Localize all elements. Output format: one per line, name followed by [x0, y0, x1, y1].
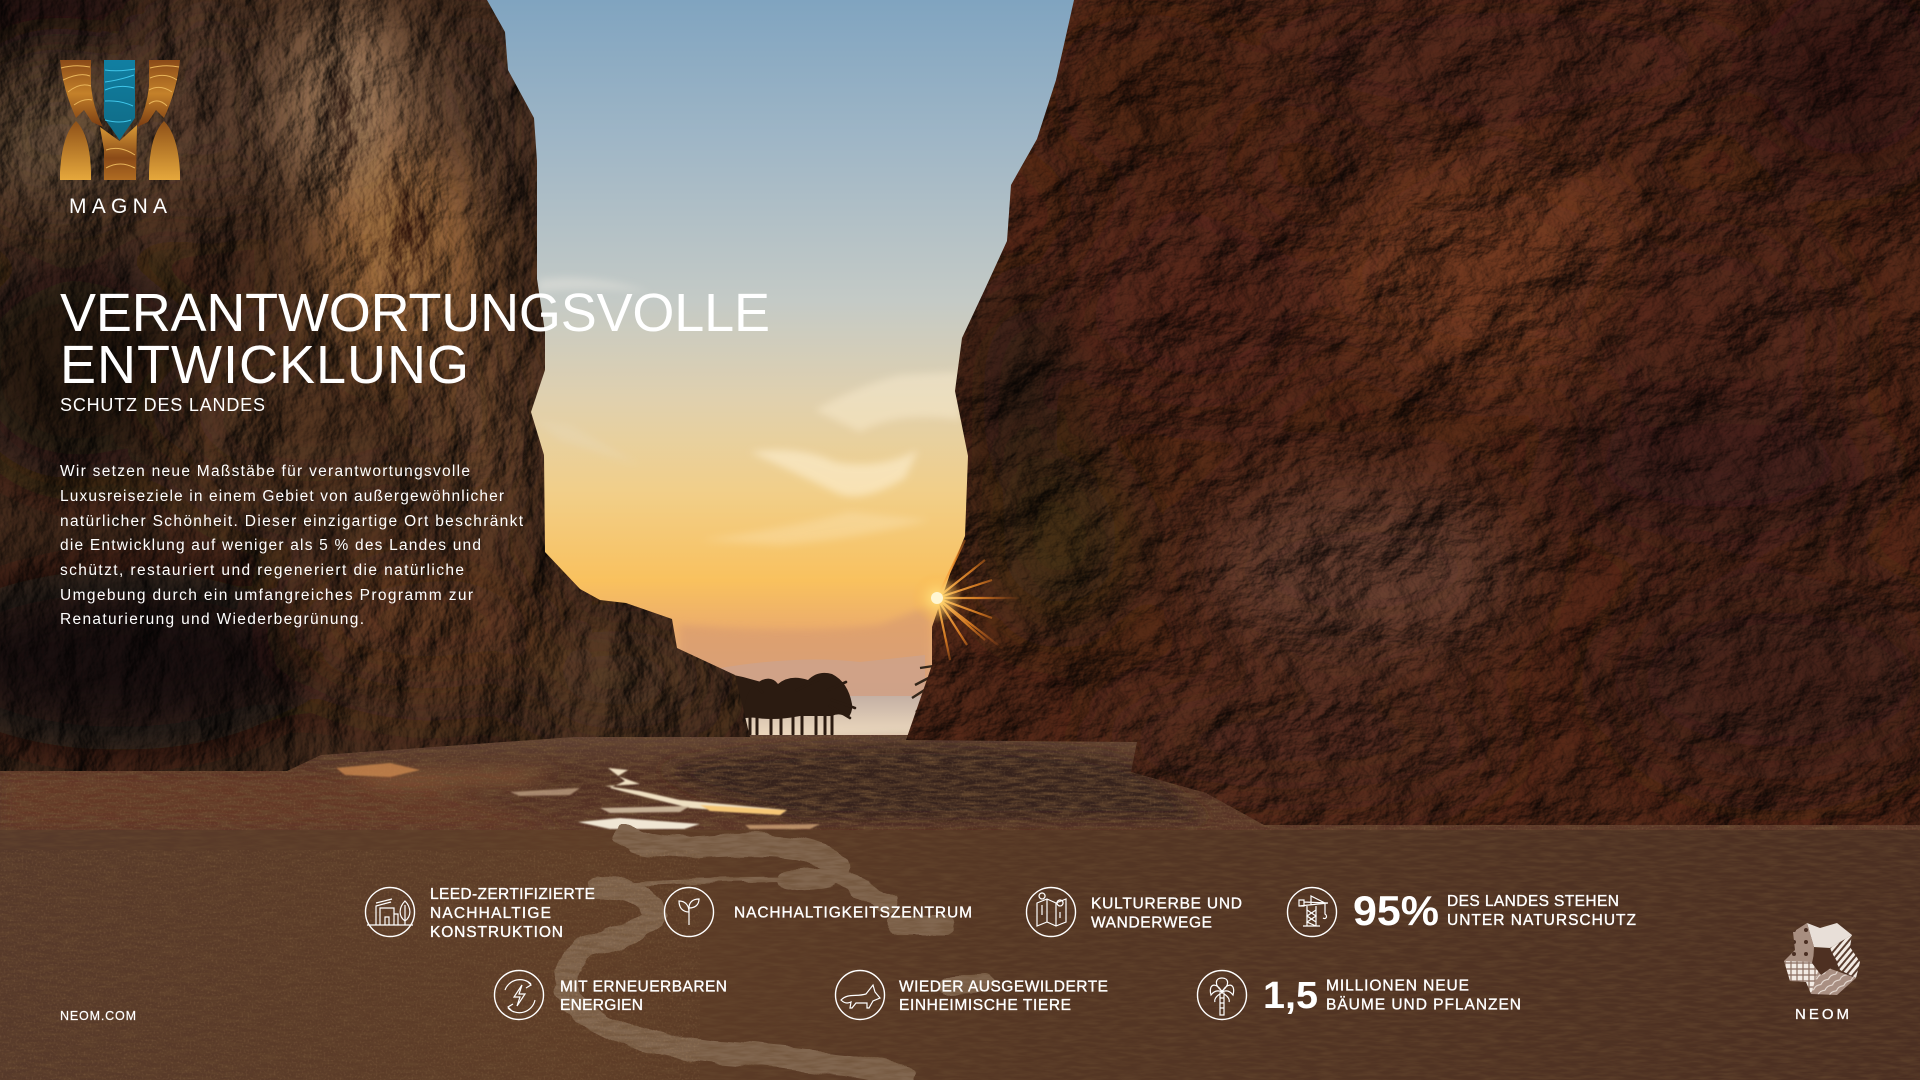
logo mark — [1784, 923, 1860, 995]
body text: natürlicher Schönheit. Dieser einzigartige Ort beschränkt — [60, 513, 524, 530]
sun — [911, 572, 963, 624]
feature: sustainability centre: NACHHALTIGKEITSZENTRUM — [734, 904, 972, 922]
left cliff — [0, 0, 760, 790]
title — [60, 283, 770, 395]
sky background — [440, 0, 1120, 700]
body text: schützt, restauriert und regeneriert die natürliche — [60, 562, 464, 579]
icon: palm tree — [1198, 970, 1246, 1020]
body text: die Entwicklung auf weniger als 5 % des Landes und — [60, 537, 481, 554]
body text: Luxusreiseziele in einem Gebiet von außergewöhnlicher — [60, 488, 504, 505]
stat: 95 percent protected — [1288, 887, 1636, 936]
logo wordmark: NEOM — [1795, 1006, 1849, 1023]
icon: lightning and arrows — [494, 970, 544, 1020]
feature: reintroduced native animals: WIEDER AUSGEWILDERTE — [899, 978, 1108, 996]
number: 1,5 — [1263, 975, 1318, 1017]
feature: cultural heritage and trails: KULTURERBE UND — [1091, 896, 1242, 912]
body text: Umgebung durch ein umfangreiches Programm zur — [60, 587, 473, 604]
stream through the band — [566, 836, 985, 1076]
palm fronds at right cliff — [912, 665, 940, 712]
number: 95% — [1353, 887, 1439, 934]
feature: LEED-certified construction — [366, 886, 595, 941]
icon: map — [1026, 888, 1076, 936]
feature: sustainability centre — [664, 888, 972, 936]
feature: renewable energy — [494, 970, 727, 1020]
icon: fox — [836, 970, 884, 1020]
feature: LEED-certified construction: NACHHALTIGE — [430, 905, 551, 922]
title: VERANTWORTUNGSVOLLE — [60, 283, 770, 343]
palm grove — [700, 668, 855, 737]
website: NEOM.COM — [60, 1009, 136, 1023]
ground texture — [0, 735, 1920, 830]
stat: 95 percent protected: DES LANDES STEHEN — [1447, 893, 1619, 910]
stat: 1.5 million trees and plants: MILLIONEN NEUE — [1326, 978, 1469, 994]
title: ENTWICKLUNG — [60, 335, 469, 395]
band texture — [0, 830, 1920, 1080]
feature: LEED-certified construction: LEED-ZERTIFIZIERTE — [430, 886, 595, 903]
ground — [0, 735, 1920, 840]
feature: reintroduced native animals: EINHEIMISCHE TIERE — [899, 997, 1071, 1014]
sun rays — [937, 540, 1020, 660]
icon: building and tree — [366, 888, 414, 936]
feature: renewable energy: ENERGIEN — [560, 997, 643, 1014]
feature: renewable energy: MIT ERNEUERBAREN — [560, 978, 727, 996]
feature: cultural heritage and trails: WANDERWEGE — [1091, 914, 1212, 932]
body text: Wir setzen neue Maßstäbe für verantwortungsvolle — [60, 463, 470, 480]
body text — [60, 463, 524, 628]
logo wordmark: MAGNA — [69, 195, 167, 218]
logo: NEOM — [1784, 923, 1860, 1023]
icon: sprout — [664, 888, 714, 936]
logo: Magna — [60, 60, 180, 218]
distant hills — [680, 605, 930, 700]
feature: LEED-certified construction: KONSTRUKTION — [430, 924, 563, 941]
icon: crane — [1288, 888, 1336, 936]
logo mark — [60, 60, 180, 180]
body text: Renaturierung und Wiederbegrünung. — [60, 611, 364, 628]
stat: 1.5 million trees and plants: BÄUME UND PFLANZEN — [1326, 996, 1521, 1014]
bottom information band background — [0, 830, 1920, 1080]
mud bank and ground shading — [0, 745, 1210, 830]
subtitle: SCHUTZ DES LANDES — [60, 395, 265, 415]
stat: 1.5 million trees and plants — [1198, 970, 1521, 1020]
water reflections — [336, 763, 820, 829]
right cliff — [900, 0, 1920, 830]
feature: cultural heritage and trails — [1026, 888, 1242, 936]
stat: 95 percent protected: UNTER NATURSCHUTZ — [1447, 912, 1636, 929]
sunset clouds — [535, 278, 960, 545]
feature: reintroduced native animals — [836, 970, 1108, 1020]
sea — [740, 696, 930, 738]
